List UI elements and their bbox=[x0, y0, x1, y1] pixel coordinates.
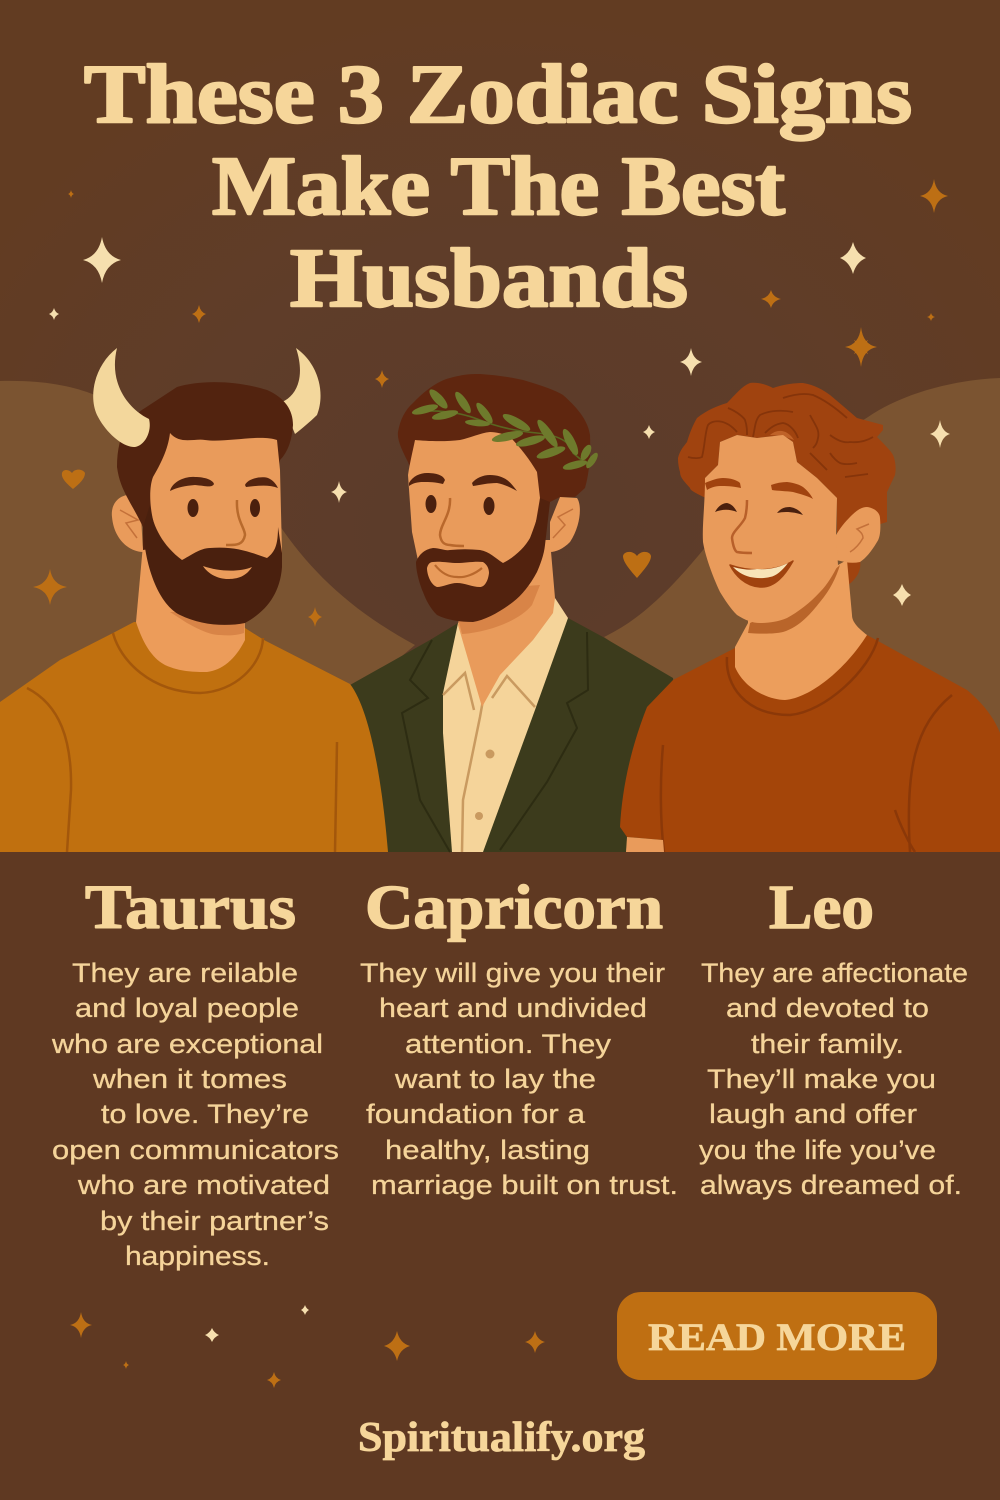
smile bbox=[730, 561, 793, 587]
nose bbox=[440, 498, 464, 546]
beard bbox=[143, 505, 282, 625]
decorative cream stars bbox=[49, 237, 950, 606]
laurel wreath bbox=[411, 387, 600, 472]
footer: site name: Spiritualify.org bbox=[358, 1415, 645, 1461]
figure: Taurus man bbox=[0, 348, 388, 852]
t-shirt bbox=[620, 635, 1000, 852]
mouth bbox=[203, 566, 252, 579]
decorative orange stars bbox=[33, 179, 948, 627]
smile bbox=[435, 565, 482, 577]
title: Husbands bbox=[290, 232, 688, 325]
mouth patch bbox=[427, 562, 489, 587]
neck bbox=[458, 540, 555, 707]
face bbox=[408, 432, 540, 590]
figure: Capricorn man bbox=[350, 374, 690, 852]
jacket bbox=[350, 618, 690, 852]
nose bbox=[732, 500, 752, 553]
hair bbox=[117, 382, 293, 550]
text block: Taurus description: who are motivated bbox=[77, 1170, 330, 1200]
bottom decorative stars bbox=[70, 1305, 545, 1388]
text block: Taurus description: when it tomes bbox=[92, 1064, 287, 1094]
eyes bbox=[426, 495, 436, 513]
left horn bbox=[93, 348, 150, 447]
ear bbox=[550, 497, 580, 552]
ear bbox=[112, 495, 143, 552]
hair bbox=[678, 383, 896, 537]
ear bbox=[836, 507, 880, 563]
title: Make The Best bbox=[212, 140, 785, 233]
face bbox=[150, 433, 282, 575]
closed eyes bbox=[715, 503, 803, 515]
text block: Leo description: They’ll make you bbox=[707, 1064, 936, 1094]
text block: Leo description: laugh and offer bbox=[709, 1099, 917, 1129]
shirt bbox=[443, 598, 568, 852]
heading: Leo: Leo bbox=[769, 874, 874, 942]
title: These 3 Zodiac Signs bbox=[84, 48, 912, 141]
figure: Leo man bbox=[620, 383, 1000, 852]
lighter hair tuft bbox=[770, 431, 794, 440]
eyebrows bbox=[170, 477, 278, 491]
face bbox=[703, 435, 838, 623]
text block: Leo description: you the life you’ve bbox=[699, 1135, 936, 1165]
hair strands bbox=[688, 394, 873, 477]
heading: Taurus: Taurus bbox=[85, 874, 296, 942]
title bbox=[84, 48, 912, 325]
text block: Capricorn description: heart and undivided bbox=[379, 993, 647, 1023]
text block: Leo description: their family. bbox=[751, 1029, 904, 1059]
button: read more bbox=[617, 1292, 937, 1380]
head hair bbox=[398, 374, 590, 540]
eyes bbox=[188, 499, 198, 517]
text block: Leo description: and devoted to bbox=[726, 993, 929, 1023]
text block: Taurus description: by their partner’s bbox=[100, 1206, 329, 1236]
text block: Capricorn description: want to lay the bbox=[394, 1064, 596, 1094]
beard bbox=[416, 498, 550, 622]
right horn bbox=[282, 348, 321, 434]
behind-ear hair bbox=[847, 560, 860, 586]
text block: Capricorn description: attention. They bbox=[405, 1029, 612, 1059]
eyebrows bbox=[705, 478, 813, 499]
text block: Leo description bbox=[699, 958, 968, 1200]
heading: Capricorn: Capricorn bbox=[365, 874, 663, 942]
nose bbox=[226, 500, 245, 545]
text block: Capricorn description bbox=[360, 958, 678, 1200]
icon: heart right bbox=[623, 552, 651, 578]
button: read more: READ MORE bbox=[648, 1316, 906, 1359]
neck bbox=[735, 560, 867, 700]
arm bbox=[626, 837, 664, 852]
text block: Taurus description: They are reilable bbox=[72, 958, 298, 988]
text block: Capricorn description: healthy, lasting bbox=[385, 1135, 590, 1165]
neck bbox=[136, 545, 245, 672]
text block: Leo description: always dreamed of. bbox=[700, 1170, 962, 1200]
text block: Capricorn description: marriage built on trust. bbox=[371, 1170, 678, 1200]
text block: Taurus description bbox=[51, 958, 339, 1271]
text block: Taurus description: open communicators bbox=[52, 1135, 339, 1165]
text block: Taurus description: who are exceptional bbox=[51, 1029, 323, 1059]
icon: heart left bbox=[62, 470, 85, 489]
text block: Taurus description: happiness. bbox=[125, 1241, 270, 1271]
text block: Taurus description: to love. They’re bbox=[101, 1099, 309, 1129]
text block: Leo description: They are affectionate bbox=[701, 958, 968, 988]
text block: Taurus description: and loyal people bbox=[75, 993, 299, 1023]
text block: Capricorn description: foundation for a bbox=[366, 1099, 586, 1129]
text block: Capricorn description: They will give you their bbox=[360, 958, 665, 988]
eyebrows bbox=[409, 473, 517, 491]
sweater bbox=[0, 622, 388, 852]
background hills bbox=[0, 378, 1000, 800]
